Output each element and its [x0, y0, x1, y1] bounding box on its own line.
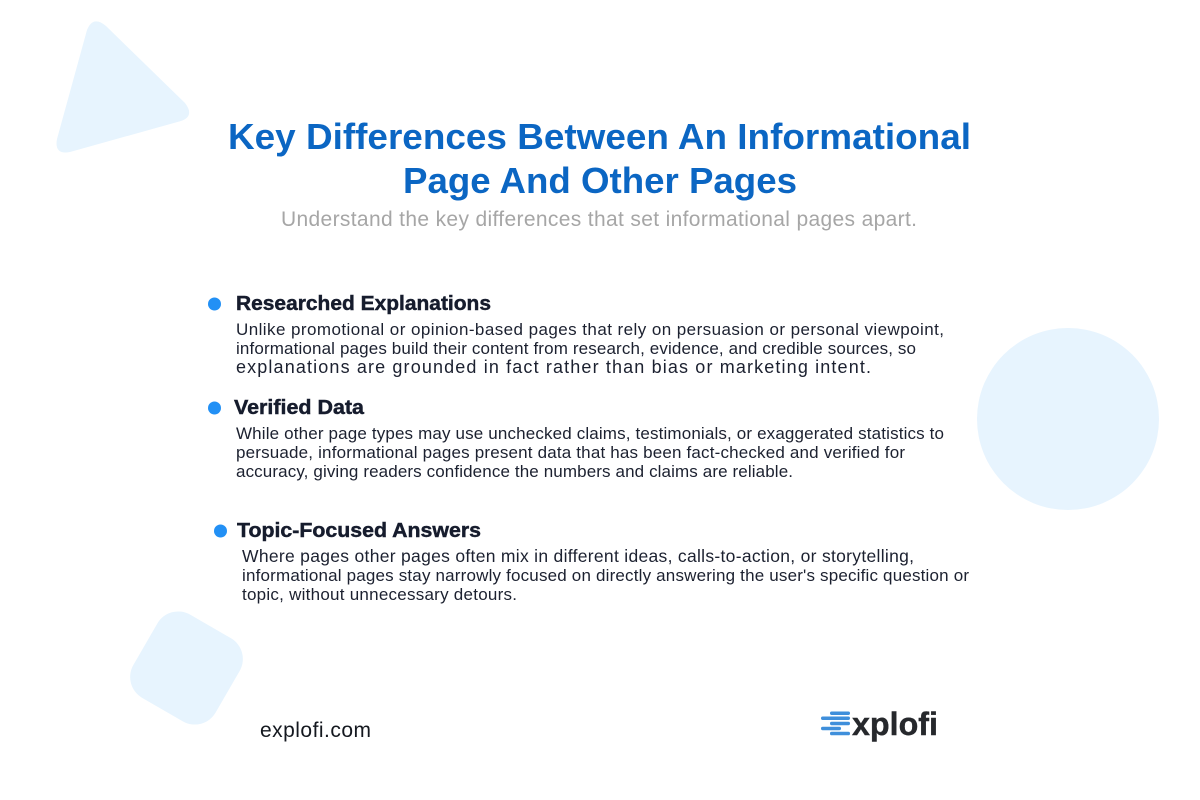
logo: explofi: [821, 706, 938, 742]
body 2: accuracy, giving readers confidence the numbers and claims are reliable.: [236, 462, 793, 481]
body 2: While other page types may use unchecked claims, testimonials, or exaggerated statistics to: [236, 424, 944, 443]
heading 3: Topic-Focused Answers: [237, 520, 481, 542]
bullet 2: [208, 402, 221, 414]
body 3: informational pages stay narrowly focused on directly answering the user's specific question or: [242, 566, 969, 585]
title: [228, 116, 971, 201]
item: Topic-Focused Answers: [214, 520, 969, 604]
bullet 3: [214, 524, 227, 538]
body 1: Unlike promotional or opinion-based pages that rely on persuasion or personal viewpoint,: [236, 320, 944, 339]
decorative triangle top-left: [57, 21, 189, 152]
heading 1: Researched Explanations: [236, 293, 491, 315]
heading 2: Verified Data: [234, 397, 365, 419]
website url: explofi.com: [260, 719, 371, 742]
decorative circle right: [977, 328, 1159, 510]
body 3: [242, 546, 969, 604]
body 1: informational pages build their content from research, evidence, and credible sources, so: [236, 339, 916, 358]
item: Researched Explanations: [208, 293, 944, 377]
body 1: explanations are grounded in fact rather than bias or marketing intent.: [236, 357, 871, 377]
item: Verified Data: [208, 397, 944, 481]
bullet 1: [208, 298, 221, 310]
logo wordmark: xplofi: [852, 706, 938, 742]
body 2: [236, 424, 944, 481]
body 3: Where pages other pages often mix in different ideas, calls-to-action, or storytelling,: [242, 546, 914, 566]
body 2: persuade, informational pages present data that has been fact-checked and verified for: [236, 443, 905, 462]
icon: logo bars: [821, 712, 850, 735]
title: Key Differences Between An Informational: [228, 116, 971, 157]
body 3: topic, without unnecessary detours.: [242, 585, 517, 604]
subtitle: Understand the key differences that set informational pages apart.: [281, 208, 917, 231]
body 1: [236, 320, 944, 377]
decorative rounded square bottom-left: [121, 603, 252, 733]
title: Page And Other Pages: [403, 160, 797, 201]
